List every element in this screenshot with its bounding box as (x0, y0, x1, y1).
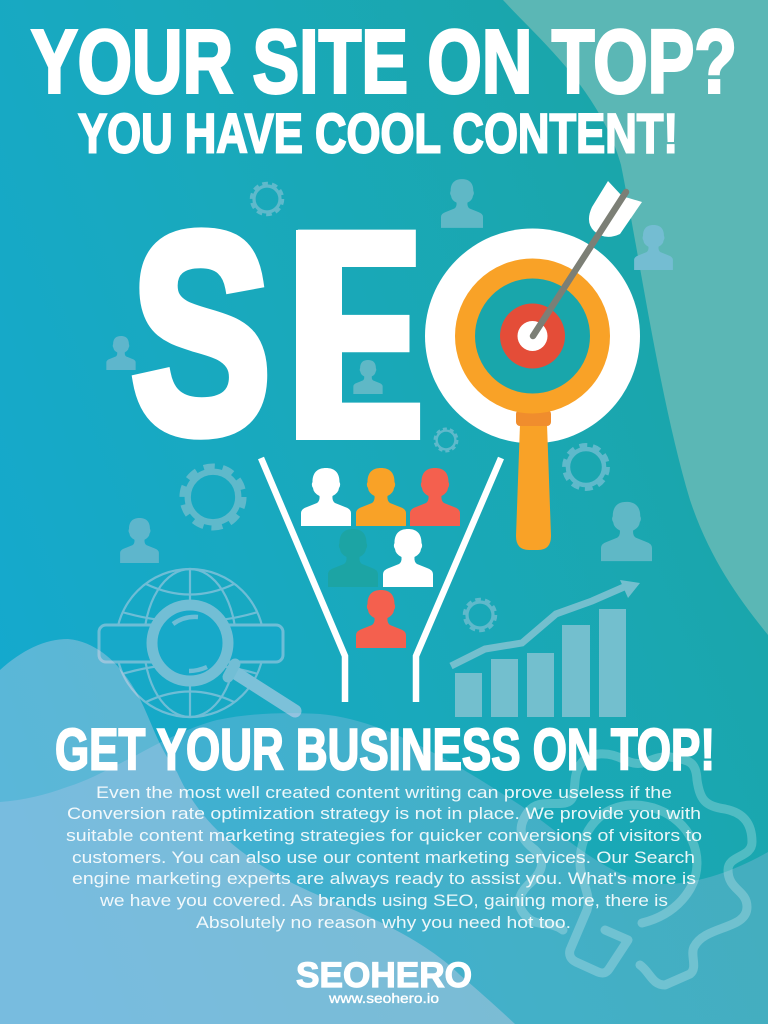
target magnifier forming letter O (425, 181, 642, 550)
person top right (634, 225, 673, 270)
footer logo (296, 956, 472, 1006)
person lower right (601, 502, 652, 561)
bars (455, 609, 626, 717)
gear 5 (464, 599, 496, 631)
letter S: S (131, 175, 271, 491)
growth bar chart (451, 580, 640, 717)
arrow fletching (589, 181, 642, 237)
faint people icons (106, 179, 673, 563)
body paragraph: customers. You can also use our content marketing services. Our Search (72, 848, 695, 867)
person centre (353, 360, 383, 394)
magnifier handle (234, 672, 295, 711)
trend arrow head (620, 580, 640, 598)
background shape: lower translucent wave band (0, 713, 768, 1024)
funnel person teal (328, 529, 378, 587)
arrow shaft (533, 192, 626, 336)
magnifier handle (516, 424, 551, 550)
funnel person red (410, 468, 460, 526)
trend arrow line (451, 587, 624, 666)
body paragraph: Even the most well created content writing can prove useless if the (96, 783, 672, 802)
gear 3 (564, 445, 608, 489)
orange ring (465, 268, 600, 404)
body paragraph: engine marketing experts are always ready to assist you. What's more is (72, 869, 696, 888)
background shape: bottom left translucent blob (0, 639, 515, 1024)
globe with search bar and magnifier (99, 569, 295, 717)
funnel right side (416, 458, 501, 702)
body paragraph: suitable content marketing strategies for quicker conversions of visitors to (66, 826, 702, 845)
funnel (261, 458, 501, 702)
white centre (518, 321, 548, 351)
funnel person white (301, 468, 351, 526)
search bar (99, 625, 283, 662)
lens highlights (173, 617, 198, 624)
gear 1 (251, 183, 283, 215)
faint gears (182, 183, 608, 631)
red bullseye (500, 304, 565, 368)
magnifier lens (152, 605, 228, 681)
funnel left side (261, 458, 345, 702)
funnel person orange (356, 468, 406, 526)
magnifier collar (516, 410, 551, 426)
person left (106, 336, 136, 370)
person top centre (441, 179, 483, 228)
SEO word: letters S and E (131, 166, 427, 502)
funnel person red bottom (356, 590, 406, 648)
funnel person white lower (383, 529, 433, 587)
white disc (425, 228, 640, 444)
person lower left (120, 518, 159, 563)
website: www.seohero.io (328, 990, 439, 1006)
body paragraph (66, 783, 702, 932)
big gear and wrench outline (519, 754, 752, 985)
body paragraph: Absolutely no reason why you need hot too. (196, 913, 571, 932)
body paragraph: we have you covered. As brands using SEO, gaining more, there is (99, 891, 668, 910)
gear 4 (435, 429, 457, 451)
gear 2 (182, 466, 244, 528)
brand name: SEOHERO (296, 956, 472, 995)
globe lines (116, 569, 264, 717)
background shape: top right blob (503, 0, 768, 635)
body paragraph: Conversion rate optimization strategy is not in place. We provide you with (67, 804, 701, 823)
letter E: E (285, 166, 427, 502)
magnifier collar (228, 664, 235, 677)
